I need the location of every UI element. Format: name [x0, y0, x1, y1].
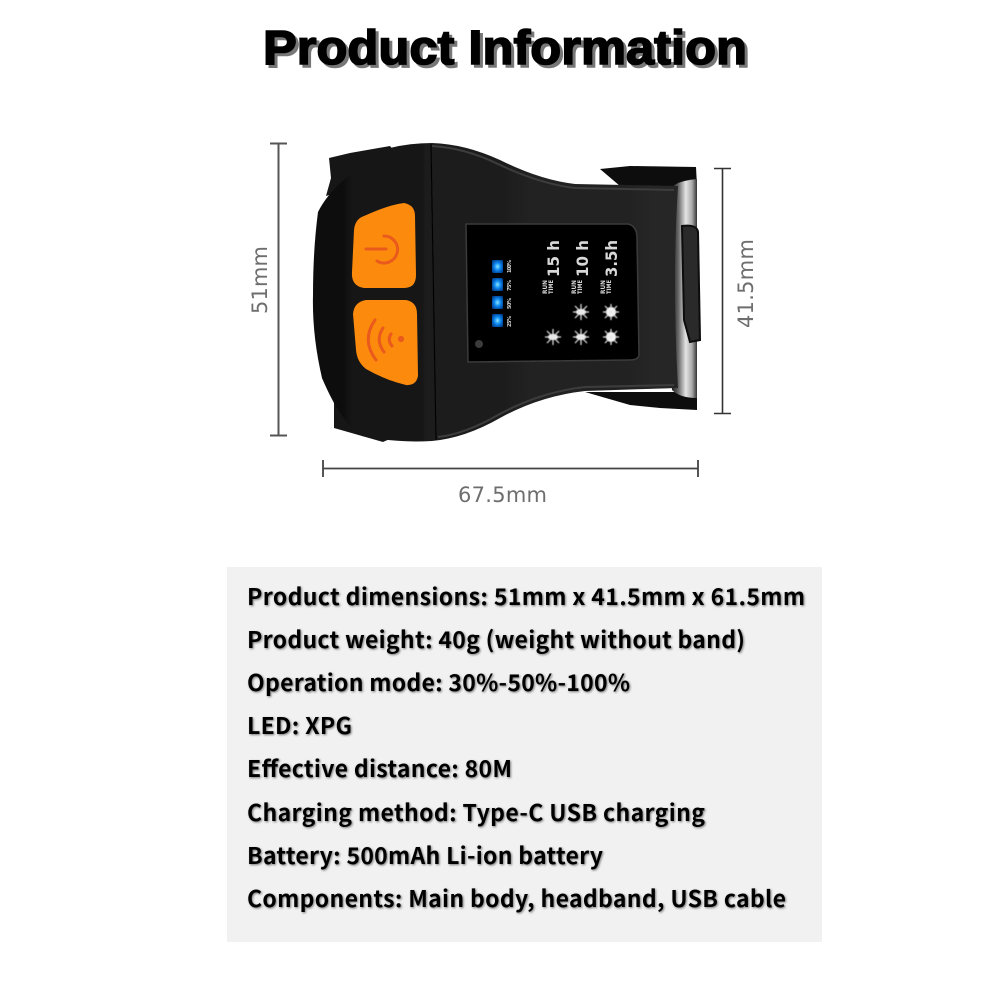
- spec: LED: LED: XPG: [247, 707, 352, 741]
- body shell: [313, 143, 678, 441]
- spec: weight: Product weight: 40g (weight without band): [247, 621, 745, 655]
- dimension: height 51mm: [248, 143, 287, 436]
- spec: components: Components: Main body, headband, USB cable: [247, 880, 786, 914]
- run times: RUN: [542, 280, 549, 294]
- display panel: [466, 224, 639, 362]
- strap top: [600, 166, 697, 186]
- battery LEDs: 100%: [507, 260, 513, 273]
- run times: TIME: [577, 280, 584, 294]
- battery LEDs: 25%: [507, 316, 513, 327]
- run times: RUN: [571, 280, 578, 294]
- title: Product Information: [263, 22, 747, 75]
- icon: power: [366, 236, 398, 263]
- title: Product Information: [266, 25, 750, 78]
- body rim highlight bottom: [438, 385, 674, 437]
- specs panel: [227, 567, 822, 942]
- run times: 10 h: [573, 240, 592, 277]
- battery LEDs: [492, 260, 513, 327]
- spec: battery: Battery: 500mAh Li-ion battery: [247, 837, 603, 871]
- dimension: width 67.5mm: 67.5mm: [458, 483, 547, 507]
- power button: [352, 203, 416, 288]
- dimension: height 51mm: 51mm: [248, 246, 272, 314]
- run times: [542, 240, 621, 294]
- mode icons: [545, 304, 619, 345]
- body rim highlight top: [432, 146, 674, 190]
- battery LEDs: 50%: [507, 298, 513, 309]
- product illustration: headlamp: [313, 143, 700, 442]
- spec: mode: Operation mode: 30%-50%-100%: [247, 664, 630, 698]
- spec: charging: Charging method: Type-C USB charging: [247, 794, 705, 828]
- front clip: [682, 226, 700, 342]
- dimension: width 67.5mm: [323, 460, 698, 507]
- dimension: height 41.5mm: [714, 168, 758, 414]
- run times: TIME: [548, 280, 555, 294]
- spec: distance: Effective distance: 80M: [247, 750, 512, 784]
- indicator dot: [475, 340, 483, 348]
- rear clip top: [326, 146, 410, 196]
- icon: wireless: [368, 320, 403, 360]
- run times: 3.5h: [602, 240, 621, 277]
- dimension: height 41.5mm: 41.5mm: [734, 239, 758, 328]
- rear clip bottom: [322, 370, 410, 442]
- battery LEDs: 75%: [507, 280, 513, 291]
- body seam: [431, 144, 436, 440]
- wireless button: [353, 300, 418, 385]
- run times: RUN: [600, 280, 607, 294]
- strap bottom: [585, 392, 697, 410]
- chrome front bezel: [672, 179, 697, 398]
- run times: 15 h: [544, 240, 563, 277]
- spec: dimensions: Product dimensions: 51mm x 41.5mm x 61.5mm: [247, 578, 805, 612]
- run times: TIME: [606, 280, 613, 294]
